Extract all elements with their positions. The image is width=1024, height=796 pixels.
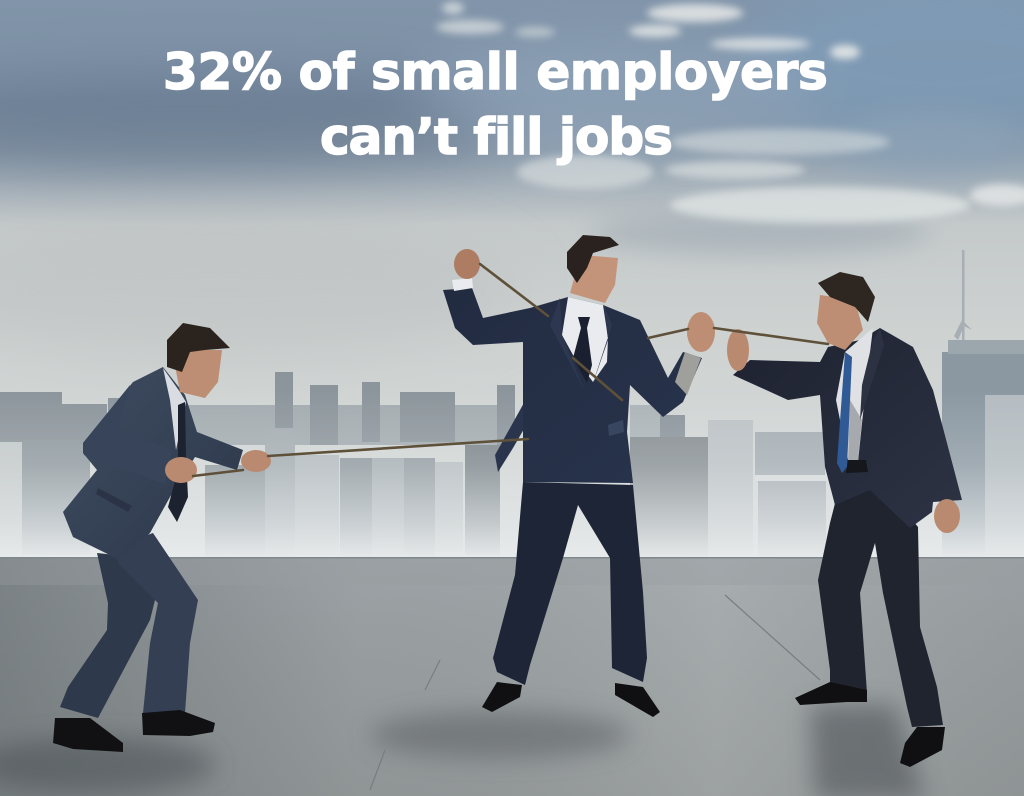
lapel right [590, 305, 612, 392]
shirt shade [848, 400, 862, 462]
tie [837, 352, 852, 473]
raised hand [454, 249, 480, 279]
rope [193, 264, 828, 476]
title line two: can’t fill jobs [320, 108, 672, 166]
shoes [482, 682, 522, 712]
jacket and arms [443, 288, 702, 483]
forearm sleeve [675, 352, 701, 395]
right hand [687, 312, 715, 352]
city skyline [0, 250, 1024, 558]
arm across body [83, 385, 172, 484]
hair [818, 272, 875, 322]
sky [0, 0, 1024, 560]
tie [573, 317, 592, 383]
jacket pocket [96, 488, 132, 512]
mid buildings [0, 420, 827, 558]
hair [167, 323, 230, 372]
figure: middle man with rope [443, 235, 715, 717]
face [172, 350, 222, 398]
hair [567, 235, 619, 283]
shirt cuff [452, 278, 473, 291]
front tower [985, 395, 1024, 558]
jacket [63, 367, 243, 560]
distant ridge of buildings [0, 372, 685, 445]
right tower [942, 250, 1024, 558]
front leg [110, 533, 198, 713]
trousers [818, 472, 943, 727]
belt [846, 460, 868, 473]
face [817, 295, 863, 350]
shirt [163, 368, 186, 450]
jacket tail [495, 392, 530, 472]
fog [0, 390, 1024, 558]
shoes [795, 682, 867, 705]
tie [168, 402, 188, 522]
lapel [860, 328, 884, 420]
lapel left [550, 298, 585, 392]
shoes [53, 718, 123, 752]
title [163, 43, 827, 166]
figure: left man pulling rope [53, 323, 271, 752]
jacket pocket [608, 420, 624, 436]
figure: right man with rope [727, 272, 962, 767]
back leg [60, 553, 165, 718]
concrete ground [0, 557, 1024, 796]
jacket [733, 328, 962, 528]
hands [727, 329, 749, 371]
clouds [436, 2, 1024, 223]
trousers [493, 482, 647, 685]
face [570, 255, 618, 303]
shirt [562, 297, 608, 382]
shirt [836, 328, 873, 462]
title line one: 32% of small employers [163, 43, 827, 101]
hands [165, 457, 197, 483]
